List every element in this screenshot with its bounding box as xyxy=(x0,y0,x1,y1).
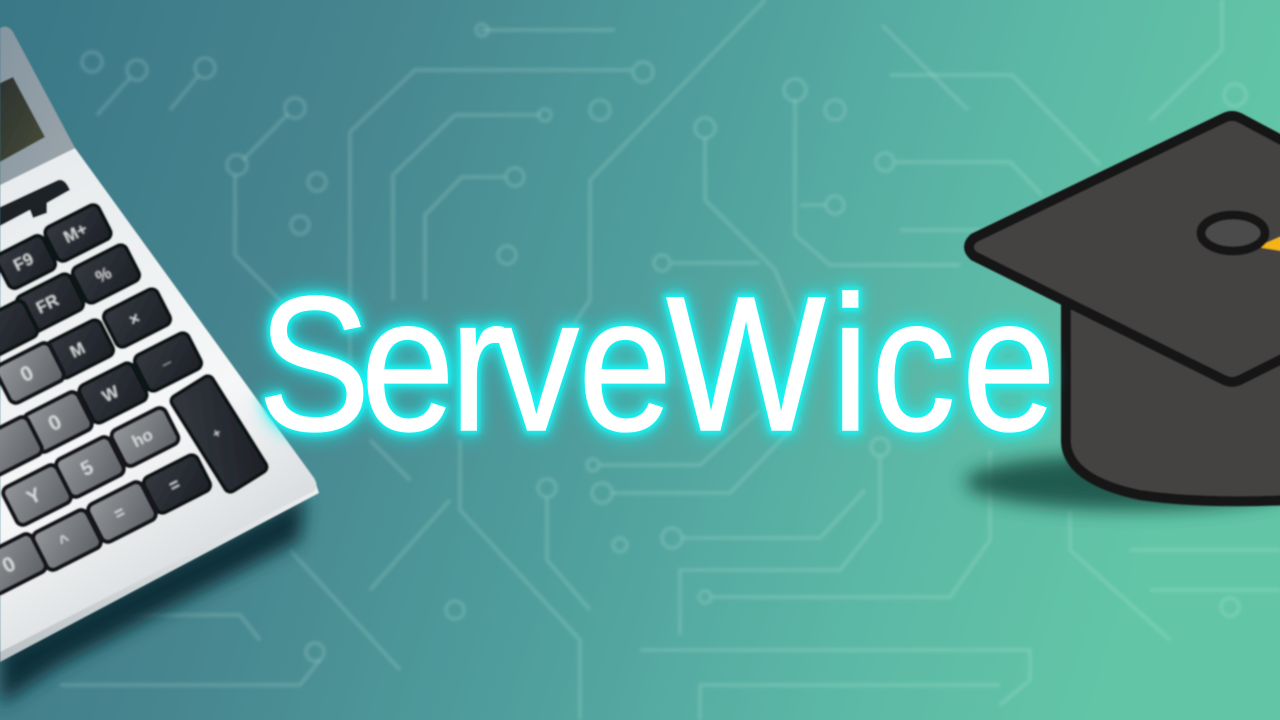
key labels: W xyxy=(99,382,123,406)
title inner glow: ServeWice xyxy=(258,257,1056,471)
cap shadow xyxy=(965,454,1280,510)
cap button xyxy=(1201,215,1265,251)
key labels: ho xyxy=(129,425,156,451)
cap base xyxy=(1066,300,1280,501)
calculator front lip xyxy=(0,478,319,662)
title text: ServeWice xyxy=(258,257,1056,471)
key labels: 0 xyxy=(17,361,37,387)
key labels: FR xyxy=(33,290,62,318)
key labels: Y xyxy=(23,484,46,509)
key labels: × xyxy=(126,308,143,330)
tassel xyxy=(1257,236,1280,251)
key labels: M+ xyxy=(60,219,91,247)
solar slot xyxy=(0,180,70,226)
key labels: M xyxy=(67,338,88,362)
key labels: F9 xyxy=(10,249,37,275)
key labels: % xyxy=(92,263,115,287)
key labels: ^ xyxy=(56,530,73,552)
calculator head xyxy=(0,27,75,185)
icon: graduation cap xyxy=(969,116,1280,501)
title outer glow: ServeWice xyxy=(258,257,1056,471)
key labels: 5 xyxy=(77,456,97,481)
calculator shadow xyxy=(0,495,305,705)
cap board xyxy=(969,116,1280,382)
key labels: = xyxy=(111,502,128,524)
calculator body xyxy=(0,148,317,652)
key labels: — xyxy=(160,357,173,370)
key labels: = xyxy=(166,474,183,496)
key labels xyxy=(0,219,224,578)
calculator screen xyxy=(0,77,45,162)
title: ServeWice xyxy=(258,257,1056,471)
icon: calculator xyxy=(0,27,319,662)
key labels: + xyxy=(209,425,224,442)
key labels: 0 xyxy=(45,410,65,436)
keypad gray keys xyxy=(0,341,181,596)
keypad dark keys xyxy=(0,202,269,515)
